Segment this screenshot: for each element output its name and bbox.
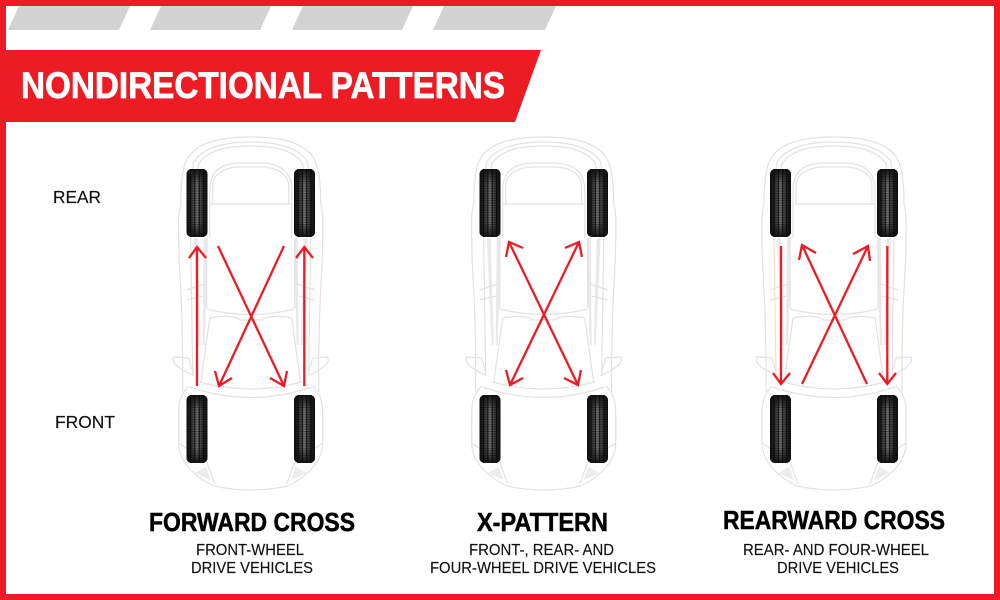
description: DRIVE VEHICLES [777,560,899,577]
panel: rearward cross [723,137,945,577]
heading: REARWARD CROSS [723,505,945,535]
title banner: NONDIRECTIONAL PATTERNS [21,65,505,106]
decorative grey stripes [8,6,556,30]
label: rear: REAR [53,187,101,207]
panel: x-pattern [430,137,656,577]
car outline [466,137,621,490]
heading: FORWARD CROSS [149,507,355,537]
rotation arrows [189,246,313,386]
description [191,542,313,577]
description: FRONT-, REAR- AND [469,542,614,559]
rotation arrows [506,242,582,385]
car outline [756,137,912,490]
tires [186,169,315,463]
panel: forward cross [149,137,355,577]
car outline [173,137,328,490]
description: REAR- AND FOUR-WHEEL [743,542,929,559]
label: front: FRONT [55,412,115,432]
rotation arrows [773,245,896,384]
description: FRONT-WHEEL [196,542,304,559]
description [743,542,929,577]
tires [770,169,898,463]
tires [480,169,608,463]
description [430,542,656,577]
description: FOUR-WHEEL DRIVE VEHICLES [430,560,656,577]
title banner [0,50,541,122]
heading: X-PATTERN [477,507,608,537]
description: DRIVE VEHICLES [191,560,313,577]
